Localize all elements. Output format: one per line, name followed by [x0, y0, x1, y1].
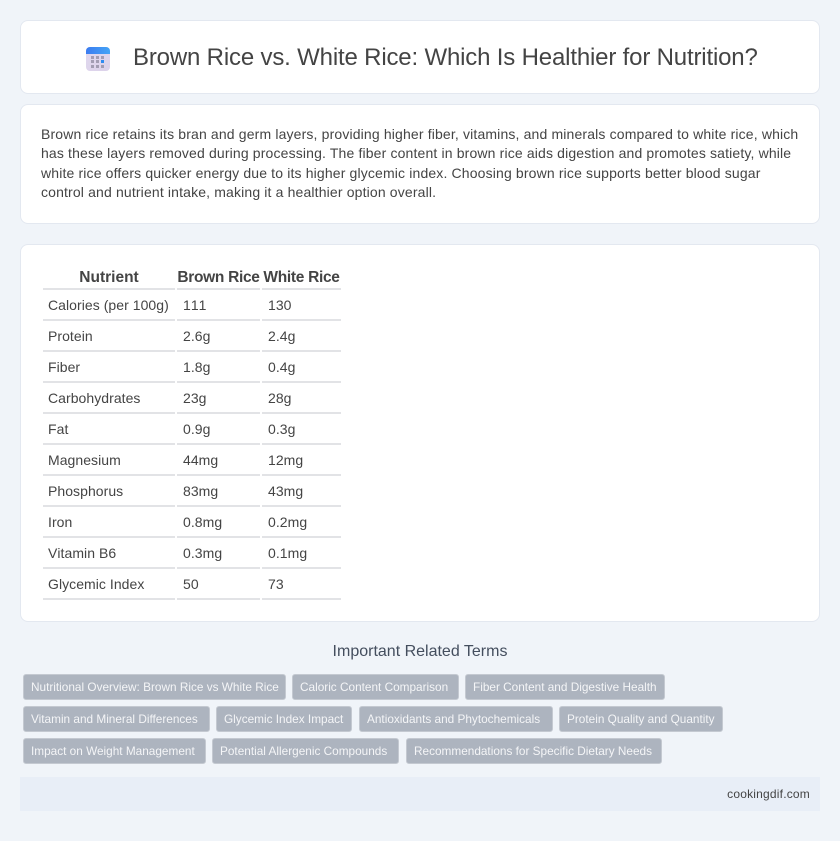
- icon: calendar: [86, 47, 110, 71]
- footer source text: cookingdif.com: [727, 787, 810, 801]
- nutrient table: 73: [268, 576, 284, 592]
- heading: important related terms: Important Related Terms: [333, 643, 507, 660]
- header panel: [20, 20, 820, 94]
- nutrient table: Glycemic Index: [48, 576, 144, 592]
- related term tags: Fiber Content and Digestive Health: [473, 680, 657, 694]
- nutrient table: 50: [183, 576, 199, 592]
- nutrient table: Brown Rice: [177, 269, 260, 286]
- nutrient table: Nutrient: [79, 269, 139, 286]
- nutrient table: Carbohydrates: [48, 390, 140, 406]
- related term tags: Recommendations for Specific Dietary Needs: [414, 744, 652, 758]
- related term tags: Nutritional Overview: Brown Rice vs White Rice: [31, 680, 279, 694]
- nutrient table: Magnesium: [48, 452, 121, 468]
- related term tags: Impact on Weight Management: [31, 744, 195, 758]
- nutrient table: 28g: [268, 390, 292, 406]
- nutrient table: 111: [183, 297, 207, 313]
- nutrient table: Phosphorus: [48, 483, 123, 499]
- panel: summary paragraph: has these layers removed during processing. The fiber content in brown rice aids digestion and promotes satiety, while: [41, 145, 791, 161]
- nutrient table: Fiber: [48, 359, 80, 375]
- nutrient table: Fat: [48, 421, 68, 437]
- nutrient table: 2.4g: [268, 328, 295, 344]
- nutrient table: 23g: [183, 390, 207, 406]
- related term tags: Potential Allergenic Compounds: [220, 744, 387, 758]
- nutrient table: [43, 269, 341, 600]
- nutrient table: 0.8mg: [183, 514, 222, 530]
- nutrient table: 44mg: [183, 452, 218, 468]
- nutrient table: 2.6g: [183, 328, 210, 344]
- nutrient table: Calories (per 100g): [48, 297, 169, 313]
- related term tags: Vitamin and Mineral Differences: [31, 712, 198, 726]
- panel: summary paragraph: Brown rice retains its bran and germ layers, providing higher fiber, vitamins, and minerals compared to white rice, which: [41, 126, 798, 142]
- related term tags: Glycemic Index Impact: [224, 712, 343, 726]
- related term tags: Caloric Content Comparison: [300, 680, 448, 694]
- related term tags: [23, 674, 723, 764]
- nutrient table: 12mg: [268, 452, 303, 468]
- nutrient table: Protein: [48, 328, 93, 344]
- nutrient table: 1.8g: [183, 359, 210, 375]
- nutrient table: 0.3g: [268, 421, 295, 437]
- title: Brown Rice vs. White Rice: Which Is Healthier for Nutrition?: [133, 44, 758, 71]
- panel: summary paragraph: control and nutrient intake, making it a healthier option overall.: [41, 184, 436, 200]
- nutrient table: 0.9g: [183, 421, 210, 437]
- nutrient table: 0.1mg: [268, 545, 307, 561]
- nutrient table: White Rice: [263, 269, 340, 286]
- nutrient table: 0.2mg: [268, 514, 307, 530]
- nutrient table: 0.4g: [268, 359, 295, 375]
- footer bar: [20, 777, 820, 811]
- nutrient table: 43mg: [268, 483, 303, 499]
- related term tags: Antioxidants and Phytochemicals: [367, 712, 540, 726]
- nutrient table: 0.3mg: [183, 545, 222, 561]
- nutrient table: Iron: [48, 514, 72, 530]
- panel: summary paragraph: [20, 104, 820, 224]
- panel: nutrient table: [20, 244, 820, 622]
- nutrient table: Vitamin B6: [48, 545, 116, 561]
- nutrient table: 130: [268, 297, 292, 313]
- related term tags: Protein Quality and Quantity: [567, 712, 715, 726]
- nutrient table: 83mg: [183, 483, 218, 499]
- panel: summary paragraph: white rice offers quicker energy due to its higher glycemic index. Choosing brown rice supports better blood sugar: [41, 165, 761, 181]
